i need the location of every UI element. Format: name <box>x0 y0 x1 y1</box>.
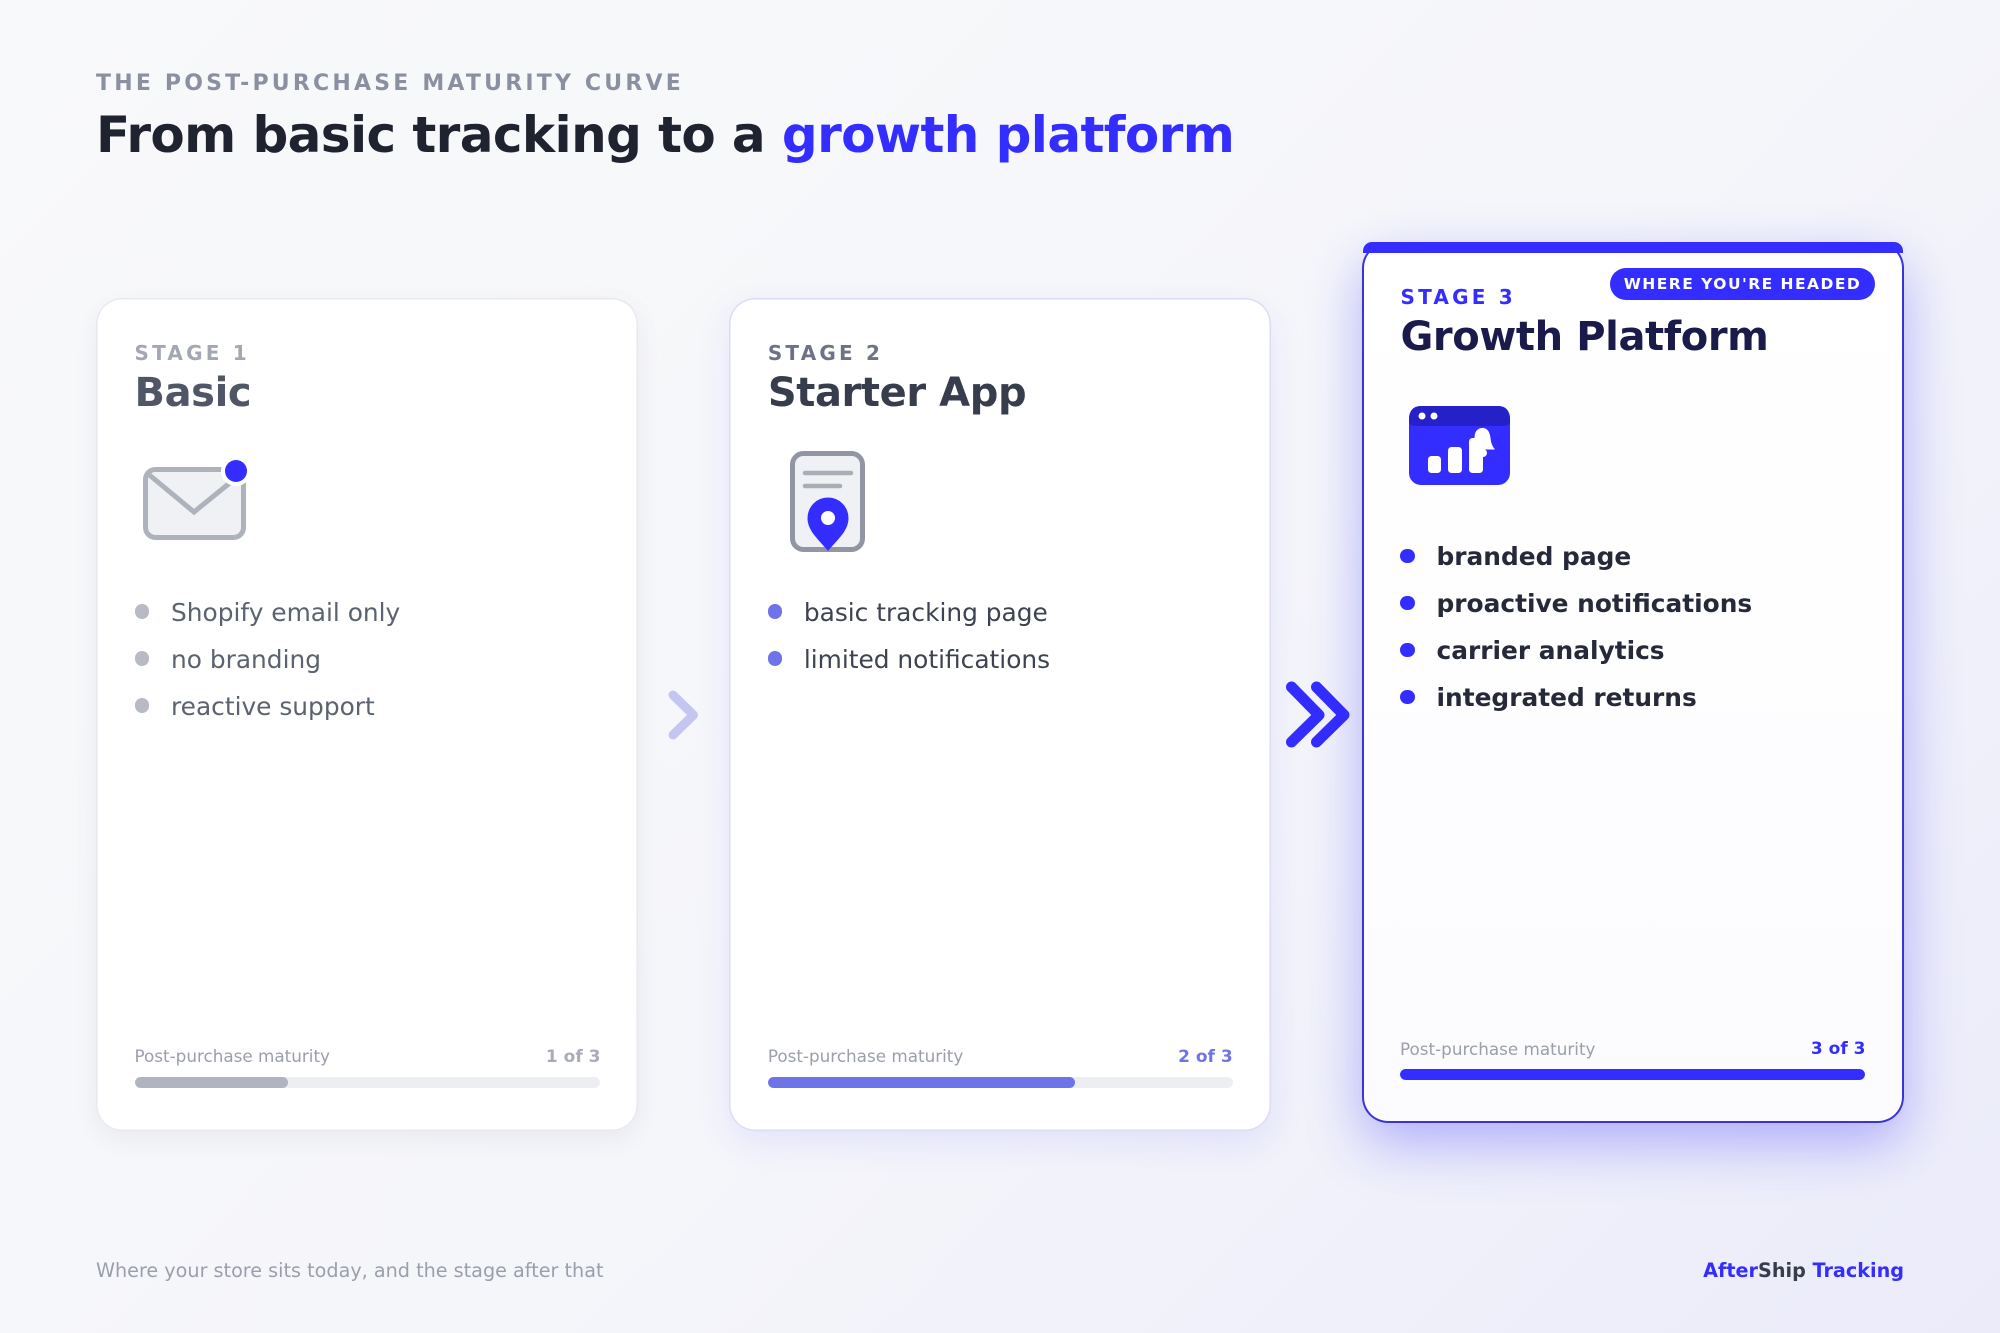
panel: stage 3 growth platform <box>1362 242 1904 1123</box>
bullet dot <box>1400 690 1414 704</box>
progress bar 2 of 3 <box>768 1077 1233 1088</box>
bullet text: integrated returns <box>1436 683 1697 712</box>
bullet text: limited notifications <box>804 645 1050 674</box>
bullet dot <box>134 604 149 618</box>
maturity label: Post-purchase maturity <box>768 1046 963 1066</box>
bullet text: Shopify email only <box>171 598 400 627</box>
badge: where you're headed: WHERE YOU'RE HEADED <box>1624 275 1861 293</box>
progress bar 1 of 3 <box>134 1077 600 1088</box>
maturity count: 1 of 3 <box>546 1047 600 1067</box>
stage 3 label: STAGE 3 <box>1400 284 1516 308</box>
bullet dot <box>768 604 782 618</box>
bullet text: branded page <box>1436 542 1631 571</box>
bullet dot <box>1400 642 1414 657</box>
bullet text: proactive notifications <box>1436 589 1752 618</box>
bullet text: reactive support <box>171 692 375 721</box>
maturity label: Post-purchase maturity <box>1400 1039 1595 1059</box>
title: From basic tracking to a growth platform <box>96 106 1234 164</box>
footer note: Where your store sits today, and the stage after that <box>96 1259 603 1282</box>
eyebrow heading: THE POST-PURCHASE MATURITY CURVE <box>96 70 684 96</box>
bullet text: no branding <box>171 645 321 674</box>
icon: browser with bar chart and bell <box>1409 406 1510 485</box>
arrow: single chevron <box>668 690 698 740</box>
top accent bar <box>1363 242 1903 253</box>
maturity label: Post-purchase maturity <box>134 1046 330 1066</box>
panel: stage 2 starter app <box>729 298 1271 1131</box>
stage 3 name: Growth Platform <box>1400 314 1768 360</box>
bullet dot <box>1400 596 1414 610</box>
footer brand: AfterShip Tracking <box>1703 1259 1904 1282</box>
stage 2 name: Starter App <box>768 370 1026 416</box>
stage 1 name: Basic <box>134 370 251 416</box>
arrow: double chevron <box>1286 682 1350 748</box>
bullet dot <box>768 651 782 666</box>
bullet text: basic tracking page <box>804 598 1048 627</box>
stage 1 label: STAGE 1 <box>134 341 250 365</box>
maturity count: 2 of 3 <box>1178 1047 1233 1067</box>
progress bar 3 of 3 <box>1400 1069 1865 1080</box>
icon: envelope with notification dot <box>143 460 247 540</box>
panel: stage 1 basic <box>96 298 638 1131</box>
bullet dot <box>134 651 149 666</box>
icon: document with location pin <box>790 451 865 552</box>
badge: where you're headed <box>1610 268 1875 300</box>
bullet dot <box>134 698 149 712</box>
bullet dot <box>1400 548 1414 563</box>
bullet text: carrier analytics <box>1436 636 1665 665</box>
stage 2 label: STAGE 2 <box>768 341 883 365</box>
maturity count: 3 of 3 <box>1811 1039 1866 1059</box>
